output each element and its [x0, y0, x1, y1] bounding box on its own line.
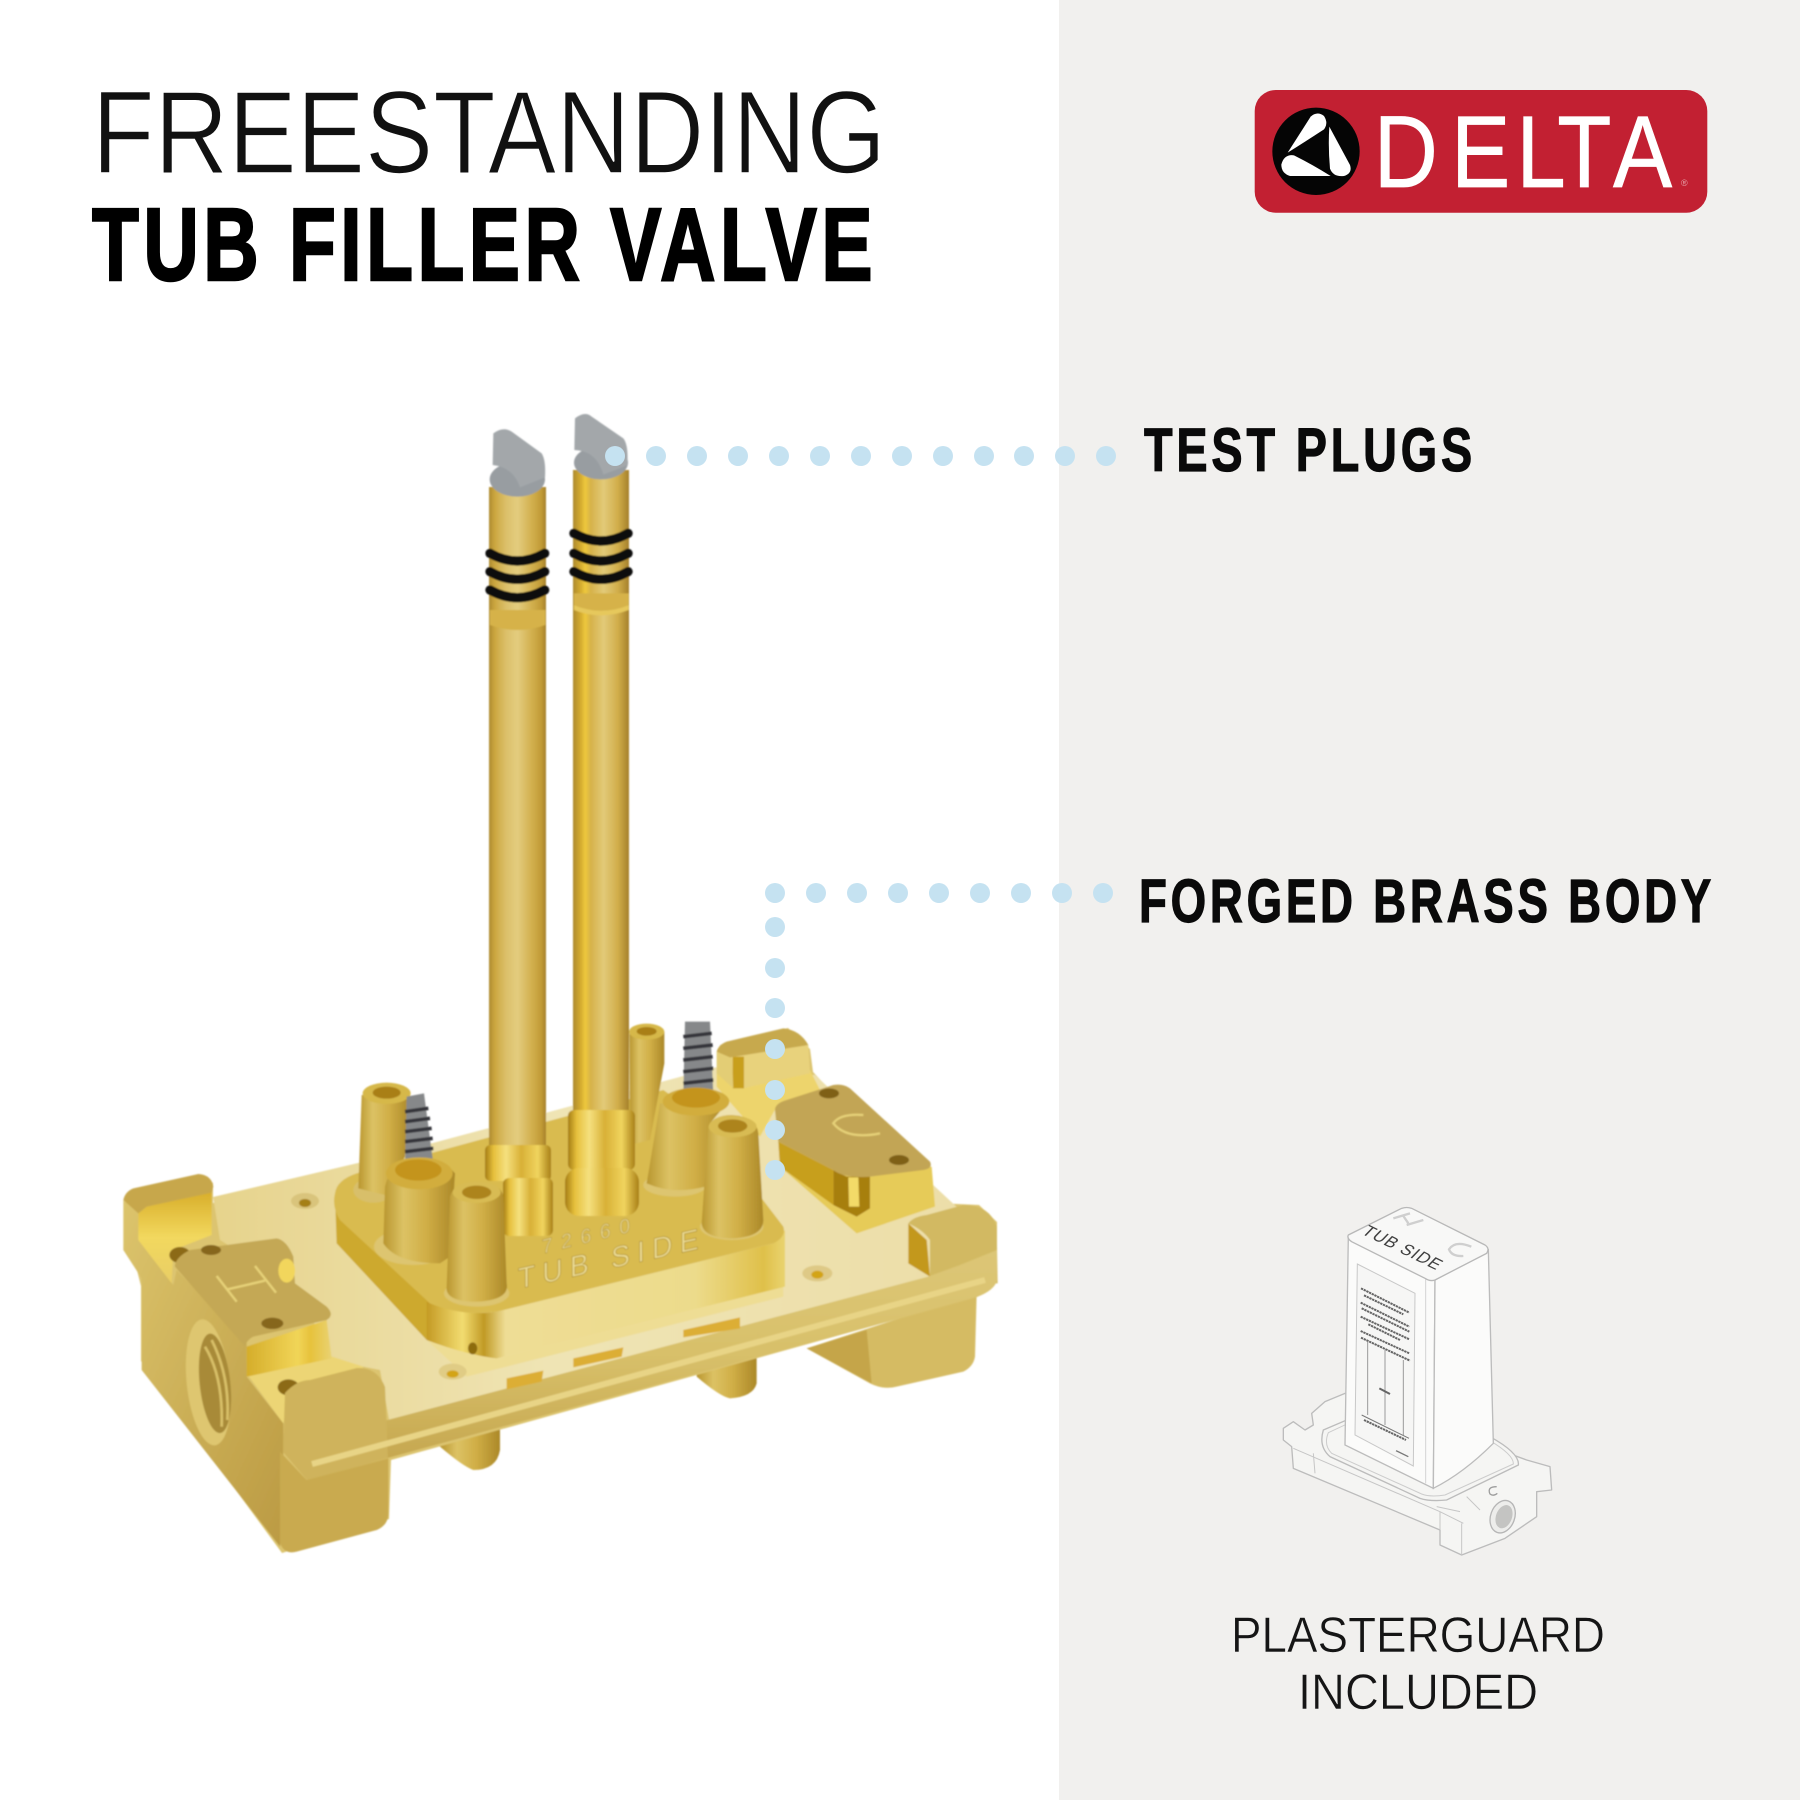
left face — [123, 1200, 283, 1547]
plasterguard box sides — [1345, 1237, 1435, 1488]
H pad side — [247, 1320, 332, 1377]
callout dots: test plugs — [605, 446, 1116, 466]
front left post — [444, 1280, 509, 1307]
valve underside pegs and right foot — [440, 1293, 977, 1470]
C letter — [833, 1115, 880, 1135]
front block — [280, 1452, 388, 1552]
O-rings right — [574, 533, 628, 579]
C pad side — [778, 1142, 935, 1233]
front plate hole — [439, 1364, 467, 1380]
left cone post — [383, 1158, 455, 1263]
rail highlight — [312, 1280, 985, 1464]
plasterguard base — [1283, 1393, 1552, 1555]
left threaded stud — [405, 1093, 433, 1167]
logo badge — [1255, 90, 1707, 213]
O-rings left — [490, 553, 545, 598]
C pad top — [775, 1085, 931, 1177]
threaded port — [1486, 1497, 1520, 1536]
plasterguard box top — [1348, 1207, 1488, 1281]
left plug — [490, 462, 545, 497]
H letter — [217, 1266, 276, 1302]
C marking on base — [1489, 1487, 1497, 1495]
H pad top — [175, 1238, 331, 1347]
grey right panel — [1059, 0, 1800, 1800]
title — [92, 67, 886, 302]
pipe details and plugs — [490, 414, 629, 630]
warning label text lines — [1361, 1288, 1410, 1361]
front corner tab — [283, 1368, 388, 1480]
port — [180, 1317, 237, 1448]
necks — [490, 610, 545, 630]
pedestal top — [334, 1090, 784, 1313]
caption line 1: PLASTERGUARD — [1231, 1607, 1605, 1663]
left end: body, H pad, port and tabs — [123, 1174, 388, 1552]
back right post — [629, 1032, 664, 1145]
front rail — [307, 1250, 997, 1480]
product photo: brass valve — [123, 414, 998, 1553]
right tab — [908, 1223, 930, 1277]
title line 1: FREESTANDING — [92, 67, 886, 199]
embossed tub side text: TUB SIDE — [518, 1221, 706, 1296]
white background panel — [0, 0, 1059, 1800]
right pipe collars — [565, 1110, 639, 1216]
plasterguard caption — [1231, 1607, 1605, 1720]
right flange — [643, 1173, 707, 1197]
area under back tab — [717, 1070, 820, 1137]
front right post — [700, 1213, 763, 1240]
left pipe collars — [485, 1145, 553, 1236]
back tab — [138, 1192, 212, 1283]
logo wordmark: DELTA — [1374, 95, 1672, 209]
callout dots: forged brass body — [765, 883, 1113, 1180]
back left post — [353, 1177, 393, 1203]
logo emblem — [1272, 108, 1360, 195]
title line 2: TUB FILLER VALVE — [92, 187, 877, 302]
front posts — [444, 1115, 763, 1307]
H and C markings — [1393, 1213, 1423, 1225]
box lid text: TUB SIDE — [1358, 1222, 1448, 1273]
plate hole back-left — [291, 1193, 319, 1209]
right pipe — [573, 470, 629, 1115]
pedestal and posts — [334, 1022, 785, 1389]
left flange — [374, 1228, 453, 1265]
base detail lines — [1293, 1448, 1480, 1555]
embossed part number: 72660 — [541, 1214, 635, 1259]
caption line 2: INCLUDED — [1298, 1664, 1538, 1720]
warning label — [1355, 1264, 1415, 1466]
dimension lines — [1368, 1342, 1403, 1435]
top plate — [213, 1067, 960, 1425]
test plug pipes — [485, 414, 639, 1236]
left pipe — [489, 487, 546, 1147]
lower step — [247, 1355, 363, 1423]
right end: back tab, C pad, right tab — [717, 1028, 998, 1283]
plasterguard flange — [1322, 1420, 1518, 1501]
reflections under pedestal — [427, 1287, 783, 1377]
pedestal front face — [427, 1230, 785, 1358]
logo: Delta — [1255, 90, 1707, 213]
base silhouette — [126, 1028, 997, 1553]
plate hole — [802, 1265, 832, 1281]
right plug — [574, 446, 628, 479]
plasterguard illustration — [1283, 1207, 1552, 1555]
registered mark: ® — [1681, 178, 1688, 188]
right cone post — [647, 1103, 727, 1190]
right threaded stud — [683, 1022, 713, 1093]
back tab — [730, 1045, 810, 1088]
pedestal left face — [335, 1193, 430, 1340]
label: test plugs: TEST PLUGS — [1144, 416, 1476, 484]
